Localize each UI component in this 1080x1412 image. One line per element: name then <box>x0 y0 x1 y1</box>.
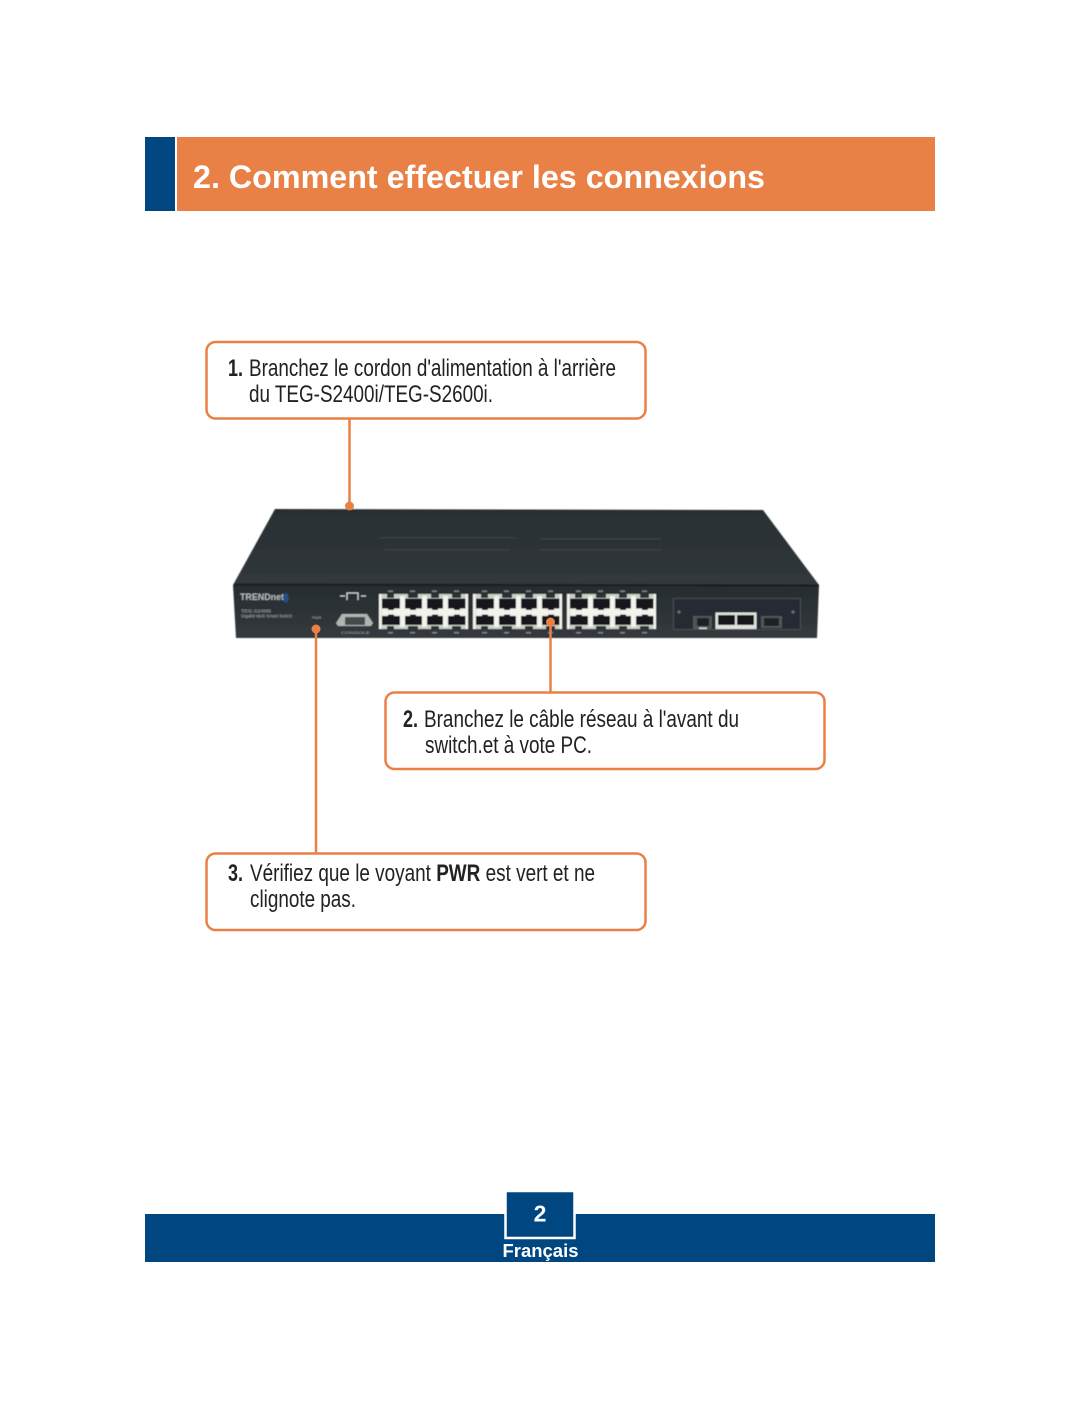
callout 1 text: 1. <box>228 355 243 382</box>
callout 1 text: Branchez le cordon d'alimentation à l'arrière <box>249 355 616 382</box>
front edge shadow <box>234 584 819 586</box>
callout 2 text: switch.et à vote PC. <box>425 732 592 759</box>
console port label: CONSOLE <box>341 630 370 635</box>
switch front face <box>233 585 819 638</box>
callout 3 text: 3. <box>228 860 243 887</box>
switch top face <box>233 509 819 585</box>
port block 3 <box>567 590 656 634</box>
port block 1 <box>379 590 468 634</box>
footer blue band <box>145 1214 935 1262</box>
callout 2 box <box>386 692 824 769</box>
page number box <box>506 1191 574 1238</box>
power LED labels: PWR <box>312 615 321 620</box>
network switch product image <box>233 509 819 638</box>
callout 2 text <box>403 706 739 759</box>
connector 1 to switch rear <box>345 418 354 510</box>
connector 2 to switch ports <box>546 618 555 692</box>
connector 3 to power LED <box>312 624 320 853</box>
callout 3 box <box>206 854 646 930</box>
expansion module <box>674 598 800 630</box>
callout 1 text <box>228 355 616 408</box>
callout 3 text: Vérifiez que le voyant PWR est vert et ne <box>250 860 595 887</box>
brand label: TRENDnet <box>240 592 285 603</box>
header orange bar <box>177 137 935 211</box>
page number: 2 <box>534 1200 546 1226</box>
header banner <box>145 137 935 211</box>
language label: Français <box>502 1241 578 1261</box>
console symbol <box>340 593 366 600</box>
footer bar <box>145 1191 935 1262</box>
brand mark <box>284 593 288 603</box>
console port <box>336 614 373 626</box>
model label: TEG-S2400i <box>241 608 271 614</box>
callout 3 text: clignote pas. <box>250 886 356 913</box>
callout 3 <box>206 854 646 930</box>
title: 2. Comment effectuer les connexions <box>193 159 765 195</box>
port block 2 <box>473 590 562 634</box>
callout 1 text: du TEG-S2400i/TEG-S2600i. <box>249 381 493 408</box>
callout 2 text: 2. <box>403 706 418 733</box>
callout 2 text: Branchez le câble réseau à l'avant du <box>424 706 739 733</box>
callout 1 box <box>206 342 646 418</box>
callout 3 text <box>228 860 595 913</box>
header blue block <box>145 137 175 211</box>
callout 1 <box>206 342 646 418</box>
model description: Gigabit Web Smart Switch <box>241 614 292 618</box>
embossed logo on top face <box>380 537 662 550</box>
callout 2 <box>386 692 824 769</box>
